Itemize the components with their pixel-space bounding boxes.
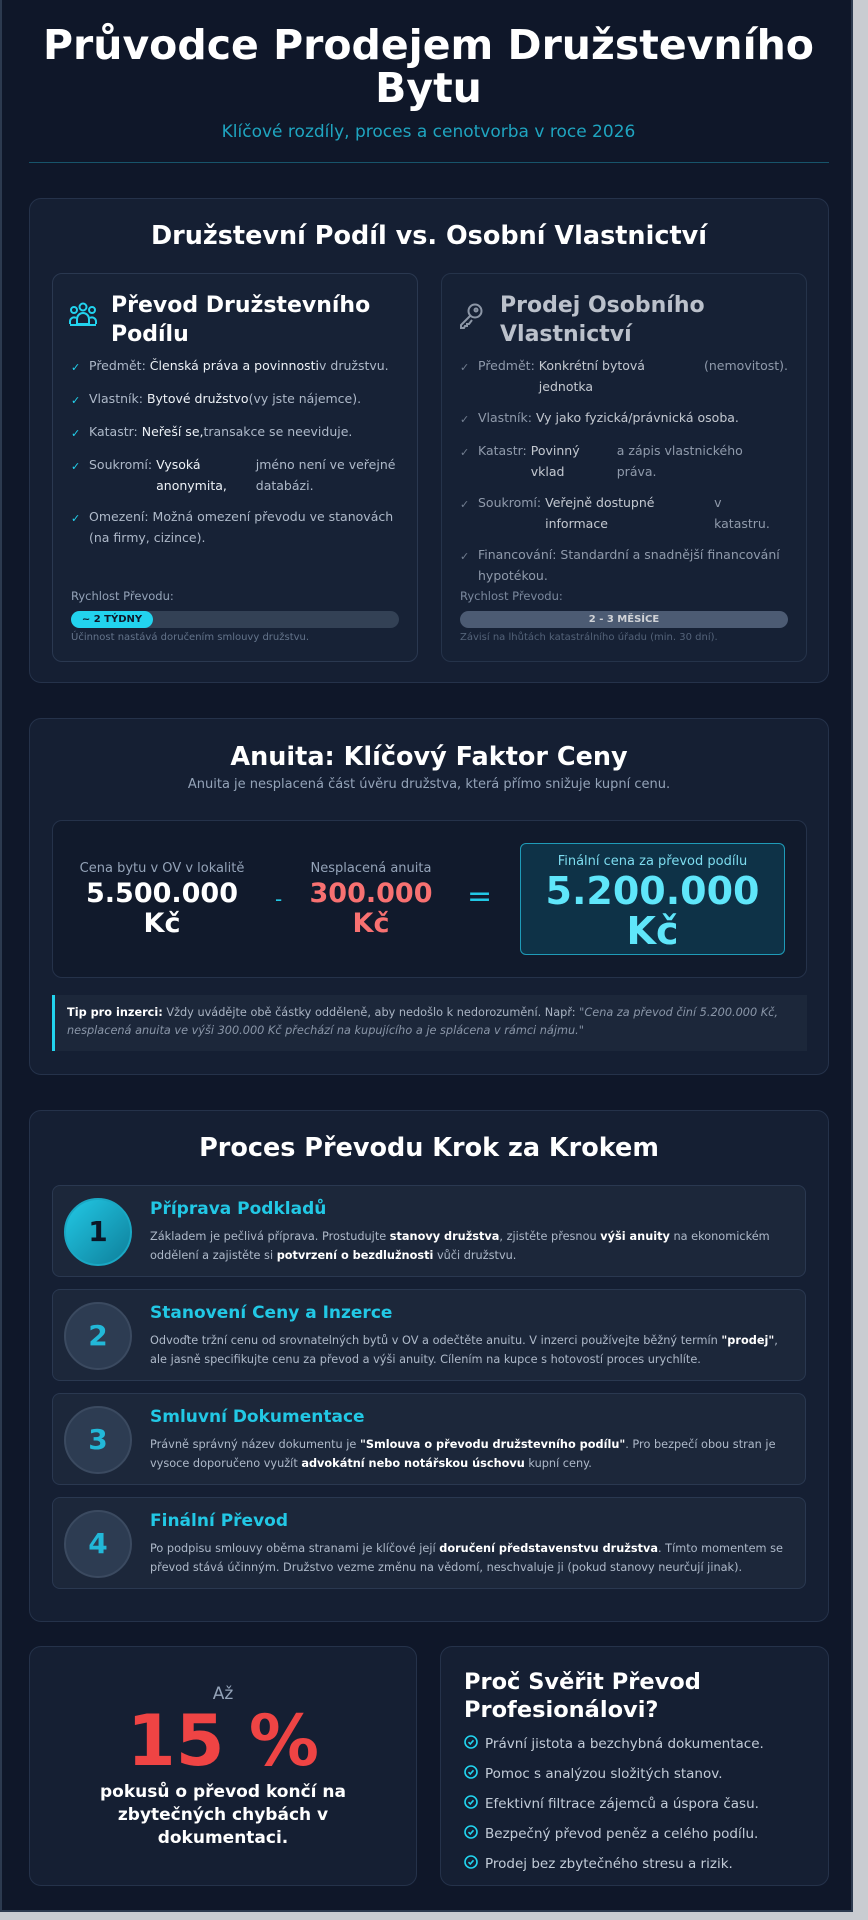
tip box bbox=[52, 995, 807, 1051]
list: benefits: Pomoc s analýzou složitých stanov. bbox=[485, 1766, 722, 1782]
list: ownership properties: a zápis vlastnického práva. bbox=[617, 443, 743, 479]
value: annuity bbox=[310, 861, 432, 939]
speed bar: 2-3 months: 2 - 3 MĚSÍCE bbox=[589, 614, 659, 625]
card title: Vlastnictví bbox=[500, 322, 632, 347]
stat card: 15 % bbox=[29, 1646, 417, 1886]
card title: Prodej Osobního bbox=[500, 293, 705, 318]
step 2 bbox=[52, 1289, 806, 1381]
list: cooperative properties: ✓ bbox=[71, 460, 80, 473]
value: annuity: 300.000 bbox=[310, 878, 432, 909]
stat card: 15 %: dokumentaci. bbox=[158, 1828, 288, 1848]
list: ownership properties: Katastr: bbox=[478, 443, 527, 458]
list: ownership properties: Povinný vklad bbox=[531, 443, 580, 479]
tip box: Tip pro inzerci: Vždy uvádějte obě částky odděleně, aby nedošlo k nedorozumění. Např: "Cena za převod činí 5.200.000 Kč, nesplacená anuita ve výši 300.000 Kč přechází na kupujícího a je splácena v rámci nájmu." bbox=[67, 1006, 778, 1037]
list: ownership properties: Předmět: bbox=[478, 358, 535, 373]
list: cooperative properties: Vysoká anonymita, bbox=[156, 457, 227, 493]
list: cooperative properties: Katastr: bbox=[89, 424, 138, 439]
final price box: Kč bbox=[626, 909, 678, 953]
list: cooperative properties: (vy jste nájemce). bbox=[249, 391, 361, 406]
list: ownership properties: ✓ bbox=[460, 361, 469, 374]
list: ownership properties: Konkrétní bytová jednotka bbox=[539, 358, 645, 394]
list: cooperative properties: Předmět: bbox=[89, 358, 146, 373]
stat card: 15 %: zbytečných chybách v bbox=[118, 1805, 328, 1825]
step 1: 1 bbox=[88, 1215, 108, 1248]
card title: Podílu bbox=[111, 322, 189, 347]
list: cooperative properties: ✓ bbox=[71, 427, 80, 440]
list: cooperative properties: jméno není ve veřejné databázi. bbox=[256, 457, 395, 493]
icon: key bbox=[460, 304, 482, 329]
list: cooperative properties: transakce se neeviduje. bbox=[203, 424, 352, 439]
list: cooperative properties: ✓ bbox=[71, 394, 80, 407]
card: personal ownership bbox=[441, 273, 807, 662]
step 4: Po podpisu smlouvy oběma stranami je klíčové její doručení představenstvu družstva. Tímto momentem se převod stává účinným. Družstvo vezme změnu na vědomí, neschvaluje ji (pokud stanovy neurčují jinak). bbox=[150, 1542, 783, 1574]
speed bar: 2-3 months: Závisí na lhůtách katastrálního úřadu (min. 30 dní). bbox=[460, 632, 718, 643]
stat card: 15 %: Až bbox=[213, 1684, 233, 1704]
step 1: Příprava Podkladů bbox=[150, 1199, 326, 1219]
heading: why professional: Profesionálovi? bbox=[464, 1697, 658, 1723]
step 4 bbox=[52, 1497, 806, 1589]
list: benefits: Právní jistota a bezchybná dokumentace. bbox=[485, 1736, 764, 1752]
list: cooperative properties: ✓ bbox=[71, 512, 80, 525]
list: ownership properties: Soukromí: bbox=[478, 495, 541, 510]
final price box bbox=[520, 843, 785, 955]
speed bar: 2 weeks: Rychlost Převodu: bbox=[71, 589, 174, 603]
list: cooperative properties: Bytové družstvo bbox=[147, 391, 249, 406]
list: cooperative properties bbox=[71, 358, 395, 545]
speed bar: 2-3 months: Rychlost Převodu: bbox=[460, 589, 563, 603]
card title bbox=[500, 293, 705, 347]
card title bbox=[111, 293, 370, 347]
value: apartment price bbox=[80, 861, 244, 939]
card: cooperative share bbox=[52, 273, 418, 662]
speed bar: 2-3 months bbox=[460, 589, 788, 643]
title: Bytu bbox=[375, 64, 482, 112]
list: ownership properties: ✓ bbox=[460, 550, 469, 563]
list: ownership properties bbox=[460, 358, 788, 583]
step 3 bbox=[52, 1393, 806, 1485]
icon: people bbox=[69, 302, 97, 326]
subtitle: annuity: Anuita je nesplacená část úvěru družstva, která přímo snižuje kupní cenu. bbox=[188, 777, 670, 792]
step 4: Finální Převod bbox=[150, 1511, 288, 1531]
equals: = bbox=[467, 879, 492, 914]
list: cooperative properties: ✓ bbox=[71, 361, 80, 374]
panel: comparison bbox=[29, 198, 829, 683]
heading: process: Proces Převodu Krok za Krokem bbox=[199, 1133, 659, 1163]
list: ownership properties: ✓ bbox=[460, 498, 469, 511]
list: ownership properties: Financování: Standardní a snadnější financování hypotékou. bbox=[478, 547, 780, 583]
heading: why professional bbox=[464, 1669, 701, 1723]
list: cooperative properties: Členská práva a povinnosti bbox=[150, 358, 319, 373]
speed bar: 2 weeks: ~ 2 TÝDNY bbox=[82, 614, 142, 625]
step 2: Stanovení Ceny a Inzerce bbox=[150, 1303, 392, 1323]
equation box bbox=[52, 820, 807, 978]
step 1 bbox=[52, 1185, 806, 1277]
list: ownership properties: Veřejně dostupné informace bbox=[545, 495, 654, 531]
card: why professional bbox=[440, 1646, 829, 1886]
final price box: Finální cena za převod podílu bbox=[558, 854, 747, 869]
step 4: 4 bbox=[88, 1527, 108, 1560]
speed bar: 2 weeks bbox=[71, 589, 399, 643]
step 1: Základem je pečlivá příprava. Prostudujte stanovy družstva, zjistěte přesnou výši anuity na ekonomickém oddělení a zajistěte si potvrzení o bezdlužnosti vůči družstvu. bbox=[150, 1230, 770, 1262]
list: cooperative properties: Vlastník: bbox=[89, 391, 143, 406]
step 2: 2 bbox=[88, 1319, 108, 1352]
step 3: 3 bbox=[88, 1423, 108, 1456]
list: cooperative properties: Neřeší se, bbox=[142, 424, 203, 439]
stat card: 15 %: 15 % bbox=[127, 1700, 319, 1782]
panel: annuity bbox=[29, 718, 829, 1075]
list: ownership properties: Vy jako fyzická/právnická osoba. bbox=[536, 410, 739, 425]
list: ownership properties: ✓ bbox=[460, 446, 469, 459]
list: ownership properties: (nemovitost). bbox=[704, 358, 788, 373]
value: apartment price: Cena bytu v OV v lokalitě bbox=[80, 861, 244, 876]
title bbox=[43, 21, 814, 112]
speed bar: 2 weeks: Účinnost nastává doručením smlouvy družstvu. bbox=[71, 632, 309, 643]
step 2: Odvoďte tržní cenu od srovnatelných bytů v OV a odečtěte anuitu. V inzerci používejte běžný termín "prodej", ale jasně specifikujte cenu za převod a výši anuity. Cílením na kupce s hotovostí proces urychlíte. bbox=[150, 1334, 778, 1366]
list: ownership properties: Vlastník: bbox=[478, 410, 532, 425]
list: cooperative properties: v družstvu. bbox=[319, 358, 389, 373]
list: benefits: Prodej bez zbytečného stresu a rizik. bbox=[485, 1856, 733, 1872]
value: apartment price: Kč bbox=[144, 908, 180, 939]
step 3: Smluvní Dokumentace bbox=[150, 1407, 365, 1427]
heading: annuity: Anuita: Klíčový Faktor Ceny bbox=[230, 742, 628, 772]
subtitle: Klíčové rozdíly, proces a cenotvorba v roce 2026 bbox=[222, 122, 635, 142]
heading: comparison: Družstevní Podíl vs. Osobní Vlastnictví bbox=[151, 221, 707, 251]
minus: - bbox=[275, 887, 282, 911]
heading: why professional: Proč Svěřit Převod bbox=[464, 1669, 701, 1695]
list: ownership properties: v katastru. bbox=[714, 495, 770, 531]
final price box: 5.200.000 bbox=[546, 869, 759, 913]
list: cooperative properties: Omezení: Možná omezení převodu ve stanovách (na firmy, cizince). bbox=[89, 509, 393, 545]
list: cooperative properties: Soukromí: bbox=[89, 457, 152, 472]
value: annuity: Nesplacená anuita bbox=[311, 861, 431, 876]
list: benefits: Bezpečný převod peněz a celého podílu. bbox=[485, 1826, 758, 1842]
card title: Převod Družstevního bbox=[111, 293, 370, 318]
list: benefits bbox=[464, 1735, 764, 1872]
panel: process steps bbox=[29, 1110, 829, 1622]
stat card: 15 %: pokusů o převod končí na bbox=[100, 1782, 346, 1802]
value: annuity: Kč bbox=[353, 908, 389, 939]
value: apartment price: 5.500.000 bbox=[86, 878, 238, 909]
title: Průvodce Prodejem Družstevního bbox=[43, 21, 814, 69]
list: benefits: Efektivní filtrace zájemců a úspora času. bbox=[485, 1796, 759, 1812]
list: ownership properties: ✓ bbox=[460, 413, 469, 426]
step 3: Právně správný název dokumentu je "Smlouva o převodu družstevního podílu". Pro bezpečí obou stran je vysoce doporučeno využít advokátní nebo notářskou úschovu kupní ceny. bbox=[150, 1438, 776, 1470]
